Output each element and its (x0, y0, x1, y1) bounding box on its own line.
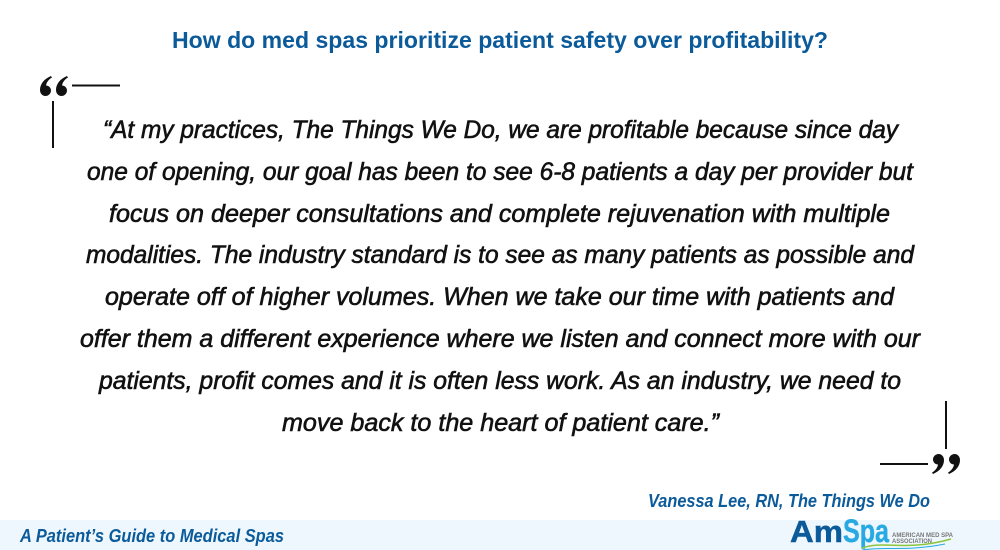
logo: AmSpa: Spa (843, 513, 889, 549)
icon: closing quotation mark with rules (880, 401, 960, 474)
logo: AmSpa: Am (790, 514, 843, 549)
quote text: move back to the heart of patient care.” (282, 409, 721, 437)
attribution: Vanessa Lee, RN, The Things We Do (648, 491, 930, 511)
quote text: modalities. The industry standard is to see as many patients as possible and (86, 241, 915, 269)
quote text: focus on deeper consultations and complete rejuvenation with multiple (109, 200, 890, 228)
quote text (80, 116, 922, 437)
logo: AmSpa (790, 513, 954, 550)
quote text: operate off of higher volumes. When we take our time with patients and (105, 283, 895, 311)
quote text: “At my practices, The Things We Do, we are profitable because since day (103, 116, 899, 144)
icon: opening quotation mark with rules (40, 76, 120, 148)
logo: AmSpa: ASSOCIATION (892, 539, 932, 545)
quote text: offer them a different experience where we listen and connect more with our (80, 325, 922, 353)
quote text: one of opening, our goal has been to see 6-8 patients a day per provider but (87, 158, 914, 186)
footer band (0, 520, 1000, 550)
title: How do med spas prioritize patient safety over profitability? (172, 27, 828, 53)
quote text: patients, profit comes and it is often less work. As an industry, we need to (98, 367, 901, 395)
footer title: A Patient’s Guide to Medical Spas (19, 526, 284, 546)
logo: AmSpa: AMERICAN MED SPA (892, 533, 954, 539)
